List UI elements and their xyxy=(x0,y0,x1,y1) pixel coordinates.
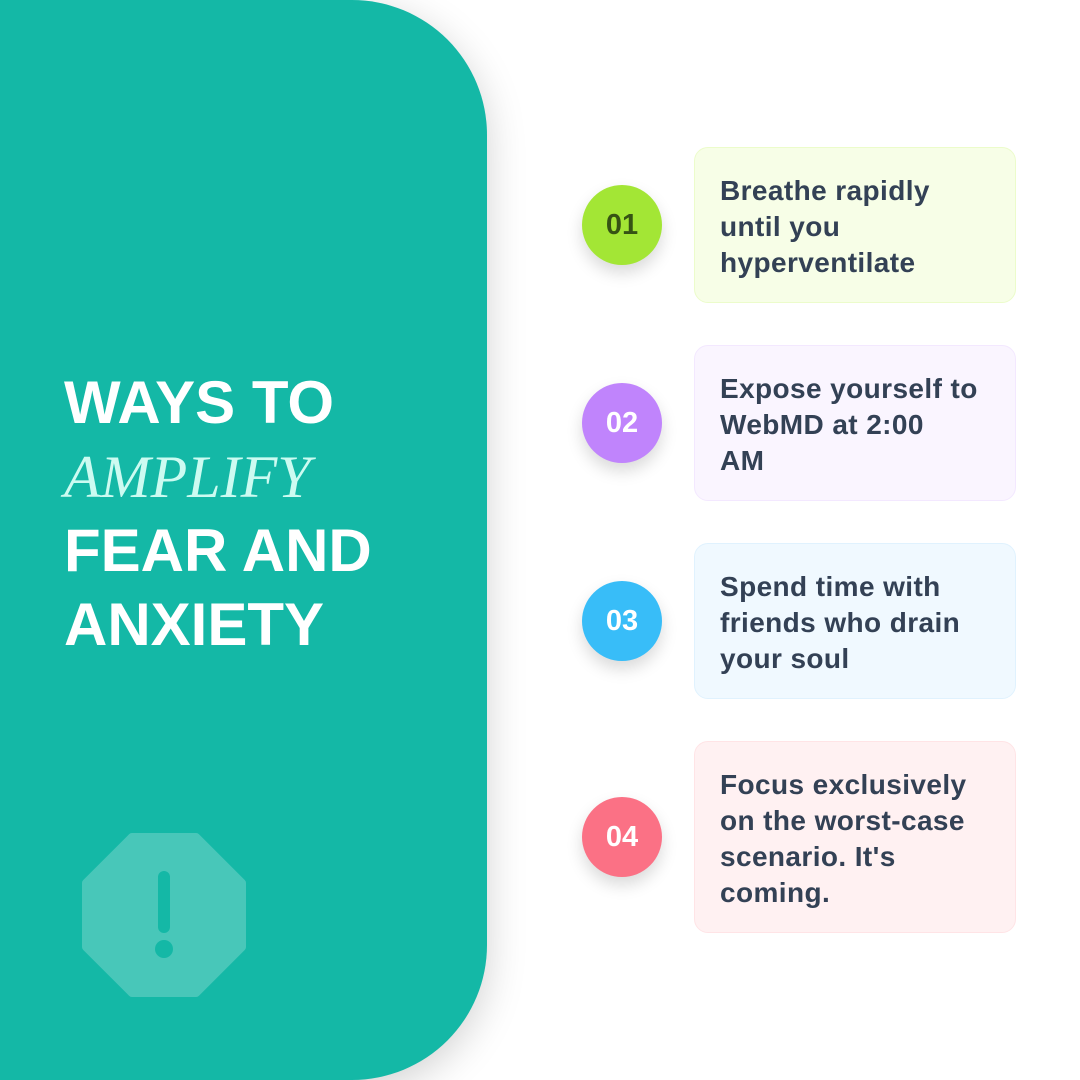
item 03 number xyxy=(582,581,662,661)
item 04 card: scenario. It's xyxy=(720,841,896,872)
item 03 number: 03 xyxy=(606,604,638,636)
item 01 card: Breathe rapidly xyxy=(720,175,930,206)
item 04 card: Focus exclusively xyxy=(720,769,966,800)
item 01 number xyxy=(582,185,662,265)
item 04 number: 04 xyxy=(606,820,638,852)
item 04 card: coming. xyxy=(720,877,830,908)
item 01 number: 01 xyxy=(606,208,638,240)
item 03 card: friends who drain xyxy=(720,607,960,638)
title xyxy=(60,369,372,658)
item 02 card: Expose yourself to xyxy=(720,373,978,404)
icon: warning octagon xyxy=(82,833,246,997)
item 03 card: Spend time with xyxy=(720,571,941,602)
item 03 card xyxy=(694,543,1016,699)
title: ANXIETY xyxy=(64,591,324,658)
item 02 number xyxy=(582,383,662,463)
title: WAYS TO xyxy=(64,369,334,436)
item 02 card xyxy=(694,345,1016,501)
title: FEAR AND xyxy=(64,517,372,584)
item 01 card: hyperventilate xyxy=(720,247,915,278)
item 02 number: 02 xyxy=(606,406,638,438)
item 01 card: until you xyxy=(720,211,840,242)
title: AMPLIFY xyxy=(64,444,311,510)
panel: left teal xyxy=(0,0,487,1080)
item 04 number xyxy=(582,797,662,877)
item 04 card: on the worst-case xyxy=(720,805,965,836)
item 01 card xyxy=(694,147,1016,303)
item 03 card: your soul xyxy=(720,643,850,674)
item 04 card xyxy=(694,741,1016,933)
item 02 card: WebMD at 2:00 xyxy=(720,409,924,440)
item 02 card: AM xyxy=(720,445,764,476)
